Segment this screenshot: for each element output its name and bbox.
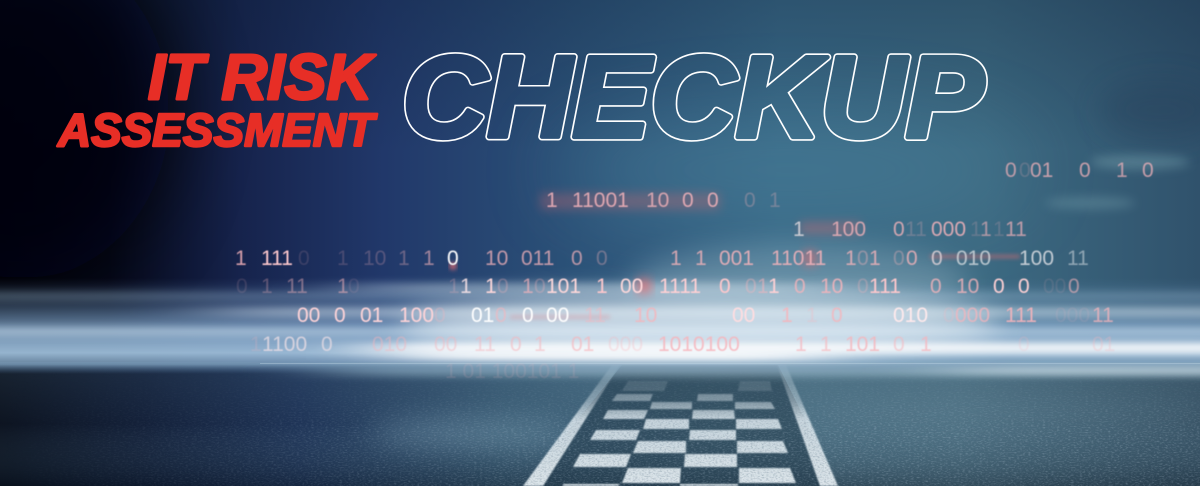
- binary code rows: 1010100: [658, 333, 740, 356]
- binary code rows: 1100: [262, 333, 307, 356]
- binary code rows: 100: [1019, 247, 1054, 270]
- binary code rows: 111: [261, 247, 293, 270]
- binary code rows: 0: [931, 247, 943, 270]
- binary code rows: 0: [1005, 159, 1017, 182]
- binary code rows: 1111: [659, 275, 701, 298]
- binary code rows: 0: [1019, 159, 1031, 182]
- binary code rows: 1: [1116, 159, 1128, 182]
- binary code rows: 0: [857, 247, 869, 270]
- binary code rows: 000: [931, 218, 966, 241]
- binary code rows: 1: [970, 218, 982, 241]
- binary code rows: 1: [920, 333, 932, 356]
- binary code rows: 0: [719, 275, 731, 298]
- binary code rows: 0: [1018, 275, 1030, 298]
- binary code rows: 1: [398, 247, 410, 270]
- binary code rows: 000: [608, 333, 643, 356]
- binary code rows: 0: [571, 247, 583, 270]
- binary code rows: 0: [495, 304, 507, 327]
- binary code rows: 00: [620, 275, 643, 298]
- asphalt grain: [84, 385, 1200, 486]
- binary code rows: 11: [1067, 247, 1089, 270]
- background: asphalt road: [0, 362, 1200, 486]
- binary code rows: 10: [363, 247, 386, 270]
- binary code rows: 0: [596, 247, 608, 270]
- binary code rows: 1: [781, 304, 793, 327]
- binary code rows: 01: [571, 333, 594, 356]
- binary code rows: 0: [794, 275, 806, 298]
- background: horizontal light streaks: [0, 278, 1200, 376]
- binary code rows: 1: [695, 247, 707, 270]
- binary code rows: 1: [806, 304, 818, 327]
- binary code rows: 1: [546, 189, 558, 212]
- binary code rows: 11001: [572, 189, 629, 212]
- binary code rows: 1: [235, 247, 247, 270]
- binary code rows: 0: [434, 304, 446, 327]
- binary code rows: 1: [596, 275, 608, 298]
- title: IT RISK ASSESSMENT: [57, 41, 378, 156]
- binary code rows: 1: [337, 247, 349, 270]
- binary code rows: 1: [522, 275, 534, 298]
- binary code rows: 100: [831, 218, 866, 241]
- binary code rows: 0: [522, 304, 534, 327]
- binary code rows: 0: [682, 189, 694, 212]
- binary code rows: 00: [732, 304, 755, 327]
- binary code rows: 01: [1092, 333, 1115, 356]
- binary code rows: 0: [943, 304, 955, 327]
- binary code rows: 1: [250, 333, 262, 356]
- binary code rows: 1: [485, 275, 497, 298]
- binary code rows: 1: [670, 247, 682, 270]
- binary code rows: 000: [1055, 304, 1090, 327]
- binary code rows: [235, 159, 1154, 383]
- binary code rows: 0: [930, 275, 942, 298]
- binary code rows: 0: [1018, 333, 1030, 356]
- binary code rows: 1: [980, 218, 992, 241]
- binary code rows: 1: [869, 247, 881, 270]
- binary code rows: 011: [521, 247, 554, 270]
- binary code rows: 0: [707, 189, 719, 212]
- binary code rows: 1: [820, 333, 832, 356]
- binary code rows: 11011: [771, 247, 826, 270]
- binary code rows: 0: [236, 275, 248, 298]
- background: stormy sky: [0, 0, 1200, 380]
- binary code rows: 1 01 100101 1: [445, 360, 579, 383]
- binary code rows: 0: [510, 333, 522, 356]
- binary code rows: 11: [286, 275, 308, 298]
- finish line: checkered track: [523, 365, 838, 486]
- binary code rows: 1: [795, 333, 807, 356]
- binary code rows: 0: [334, 304, 346, 327]
- title: IT RISK ASSESSMENT: IT RISK: [148, 41, 377, 113]
- binary code rows: 1: [769, 189, 781, 212]
- binary code rows: 0: [745, 275, 757, 298]
- binary code rows: 0: [893, 218, 905, 241]
- binary code rows: 10: [485, 247, 508, 270]
- binary code rows: 101: [546, 275, 581, 298]
- binary code rows: 01: [471, 304, 494, 327]
- binary code rows: 1: [757, 275, 769, 298]
- binary code rows: 0: [497, 275, 509, 298]
- binary code rows: 1: [460, 275, 472, 298]
- binary code rows: 100: [399, 304, 434, 327]
- binary code rows: 0: [744, 189, 756, 212]
- binary code rows: 1: [993, 218, 1005, 241]
- binary code rows: 1: [448, 275, 460, 298]
- binary code rows: 0: [447, 247, 459, 270]
- binary code rows: 1: [768, 275, 780, 298]
- binary code rows: 101: [845, 333, 880, 356]
- binary code rows: 10: [820, 275, 843, 298]
- binary code rows: 0: [893, 333, 905, 356]
- binary code rows: 10: [956, 275, 979, 298]
- binary code rows: 01: [1030, 159, 1053, 182]
- binary code rows: 00: [1043, 275, 1066, 298]
- binary code rows: 111: [1005, 304, 1037, 327]
- binary code rows: 0: [534, 275, 546, 298]
- binary code rows: 0: [1142, 159, 1154, 182]
- binary code rows: 00: [434, 333, 457, 356]
- binary code rows: 1: [793, 218, 805, 241]
- binary code rows: 1: [845, 247, 857, 270]
- binary code rows: 0: [1068, 275, 1080, 298]
- binary code rows: 1: [337, 275, 349, 298]
- binary code rows: 11: [905, 218, 927, 241]
- title: IT RISK ASSESSMENT: ASSESSMENT: [57, 104, 378, 156]
- red glow streaks behind digits: [449, 193, 1020, 319]
- binary code rows: 10: [634, 304, 657, 327]
- binary code rows: 000: [955, 304, 990, 327]
- binary code rows: 11: [584, 304, 606, 327]
- binary code rows: 0: [1079, 159, 1091, 182]
- binary code rows: 11: [474, 333, 496, 356]
- binary code rows: 1: [261, 275, 273, 298]
- binary code rows: 1: [534, 333, 546, 356]
- binary code rows: 0: [857, 275, 869, 298]
- binary code rows: 11: [1005, 218, 1027, 241]
- binary code rows: 0: [348, 275, 360, 298]
- binary code rows: 001: [719, 247, 754, 270]
- binary code rows: 0: [831, 304, 843, 327]
- binary code rows: 00: [297, 304, 320, 327]
- binary code rows: 10: [646, 189, 669, 212]
- binary code rows: 010: [893, 304, 928, 327]
- title: CHECKUP outline: CHECKUP: [402, 32, 985, 162]
- binary code rows: 0: [906, 247, 918, 270]
- binary code rows: 0: [893, 247, 905, 270]
- binary code rows: 111: [869, 275, 901, 298]
- binary code rows: 010: [956, 247, 991, 270]
- binary code rows: 01: [360, 304, 383, 327]
- binary code rows: 0: [298, 247, 310, 270]
- binary code rows: 11: [1092, 304, 1114, 327]
- binary code rows: 010: [372, 333, 407, 356]
- binary code rows: 0: [321, 333, 333, 356]
- binary code rows: 0: [993, 275, 1005, 298]
- binary code rows: 00: [546, 304, 569, 327]
- binary code rows: 1: [423, 247, 435, 270]
